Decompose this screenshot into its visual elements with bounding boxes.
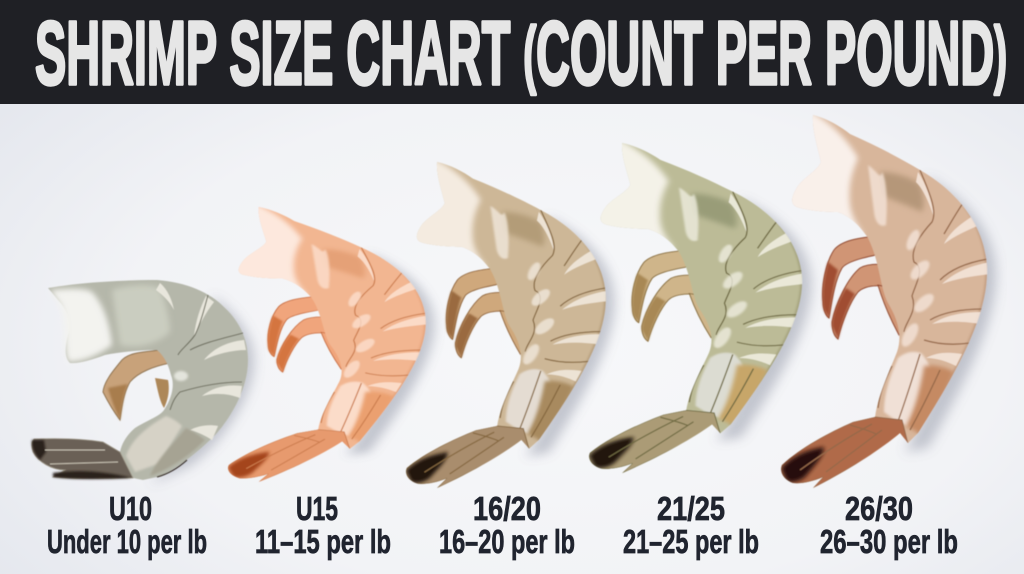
label: 16/20: 16/20 xyxy=(473,490,541,527)
shrimp: 21/25 xyxy=(588,134,811,473)
label: 21/25 xyxy=(623,490,759,560)
label: U10: Under 10 per lb xyxy=(47,523,207,560)
shrimp: U10 xyxy=(32,280,254,484)
label: 26/30: 26/30 xyxy=(845,490,913,527)
label: U10 xyxy=(47,490,207,560)
shrimp: 26/30 xyxy=(780,105,996,488)
label: 16/20: 16–20 per lb xyxy=(439,523,575,560)
label: U15: 11–15 per lb xyxy=(255,523,391,560)
label: 16/20 xyxy=(439,490,575,560)
label: U15: U15 xyxy=(296,490,338,527)
title: ) xyxy=(994,12,1007,95)
label: 26/30 xyxy=(820,490,958,560)
shrimp: 16/20 xyxy=(405,153,615,488)
title: SHRIMP SIZE CHART xyxy=(35,4,948,104)
label: 21/25: 21/25 xyxy=(657,490,725,527)
label: U15 xyxy=(255,490,391,560)
label: 21/25: 21–25 per lb xyxy=(623,523,759,560)
header band xyxy=(0,0,1024,104)
title: ( xyxy=(523,12,536,95)
label: U10: U10 xyxy=(109,490,152,527)
shrimp: U15 xyxy=(227,200,434,482)
label: 26/30: 26–30 per lb xyxy=(820,523,958,560)
